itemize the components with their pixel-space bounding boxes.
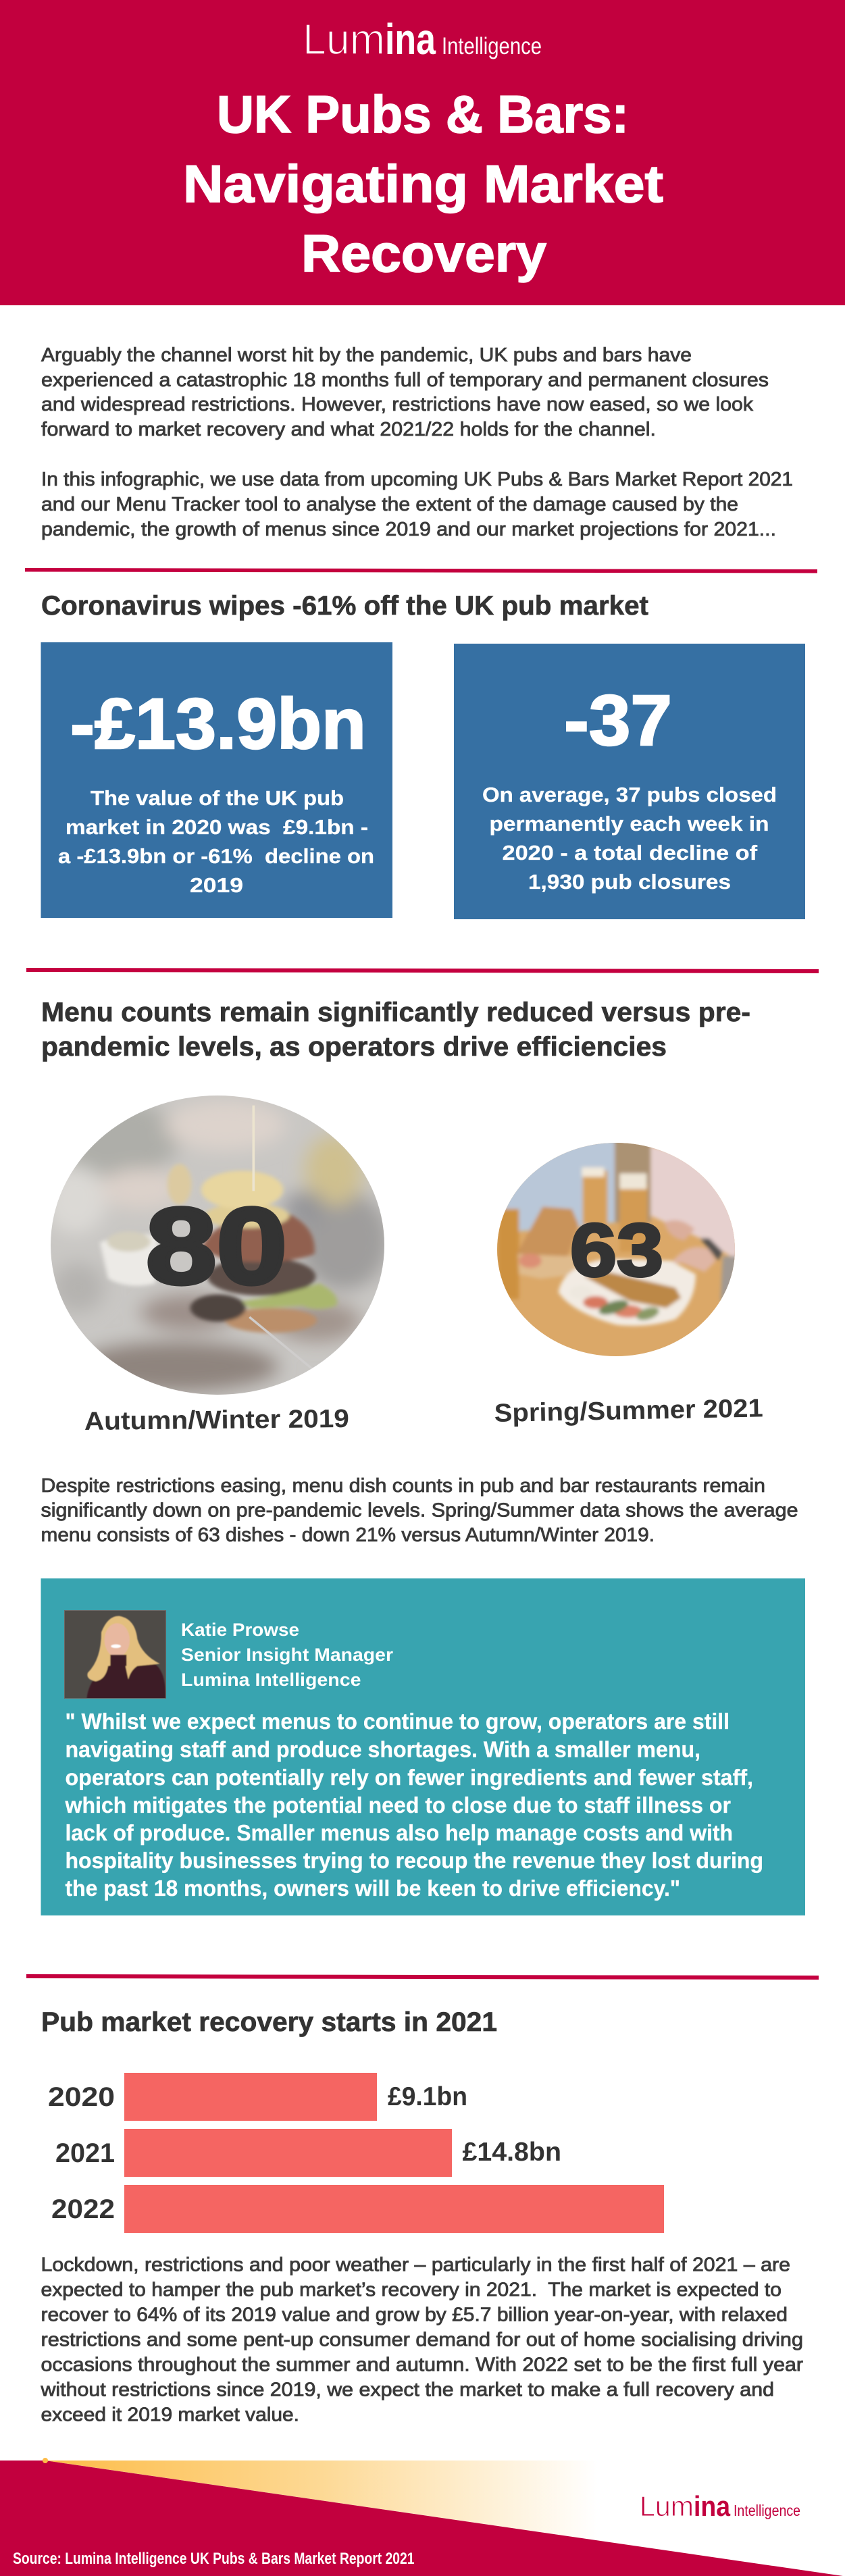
label: Autumn/Winter 2019: Autumn/Winter 2019 xyxy=(84,1405,349,1436)
market value description: The value of the UK pub xyxy=(91,786,344,810)
panel: pub closures xyxy=(454,644,805,919)
stat: -£13.9bn: -£13.9bn xyxy=(70,684,366,764)
menu text block: Despite restrictions easing, menu dish counts in pub and bar restaurants remain xyxy=(41,1475,765,1497)
footer logo: Lum xyxy=(640,2490,694,2522)
intro text: Arguably the channel worst hit by the pandemic, UK pubs and bars have xyxy=(41,344,692,366)
market value description: 2019 xyxy=(190,873,243,897)
quote text: the past 18 months, owners will be keen to drive efficiency." xyxy=(65,1876,680,1901)
footer logo: Intelligence xyxy=(734,2502,800,2519)
recovery text block: Lockdown, restrictions and poor weather – particularly in the first half of 2021 – are xyxy=(41,2255,790,2276)
logo: Lumina Intelligence xyxy=(303,15,542,63)
quote text: lack of produce. Smaller menus also help manage costs and with xyxy=(65,1820,733,1845)
quote text xyxy=(65,1709,763,1901)
intro text: In this infographic, we use data from upcoming UK Pubs & Bars Market Report 2021 xyxy=(41,469,793,490)
footer logo xyxy=(640,2490,800,2522)
recovery text block xyxy=(40,2255,803,2426)
closures description xyxy=(482,783,777,894)
closures description: 1,930 pub closures xyxy=(528,870,731,894)
recovery text block: without restrictions since 2019, we expect the market to make a full recovery and xyxy=(40,2379,774,2400)
number 63: 63 xyxy=(570,1209,663,1292)
intro text: forward to market recovery and what 2021/22 holds for the channel. xyxy=(41,419,656,440)
portrait photo xyxy=(65,1610,166,1700)
source note: Source: Lumina Intelligence UK Pubs & Bars Market Report 2021 xyxy=(13,2550,415,2568)
logo: Lumina Intelligence: Lum xyxy=(303,15,385,63)
photo circle: burger with 80 dishes xyxy=(45,1091,389,1398)
market value description xyxy=(58,786,374,897)
title: UK Pubs & Bars: xyxy=(217,84,629,144)
quote text: operators can potentially rely on fewer ingredients and fewer staff, xyxy=(65,1765,753,1790)
recovery text block: recover to 64% of its 2019 value and grow by £5.7 billion year-on-year, with relaxed xyxy=(41,2304,788,2326)
section heading: menu counts xyxy=(41,998,750,1062)
intro text xyxy=(41,344,793,540)
speaker name and role: Katie Prowse xyxy=(181,1620,299,1640)
bar 2021 xyxy=(55,2129,561,2177)
bar chart: market value by year xyxy=(48,2073,664,2233)
intro text: and our Menu Tracker tool to analyse the extent of the damage caused by the xyxy=(41,494,738,515)
footer band xyxy=(0,2458,845,2576)
section heading: recovery: Pub market recovery starts in 2021 xyxy=(41,2007,497,2037)
recovery text block: occasions throughout the summer and autumn. With 2022 set to be the first full year xyxy=(41,2354,803,2376)
closures description: On average, 37 pubs closed xyxy=(482,783,777,806)
bar 2020: 2020 xyxy=(48,2082,115,2112)
speaker name and role: Senior Insight Manager xyxy=(181,1645,394,1665)
menu text block: menu consists of 63 dishes - down 21% versus Autumn/Winter 2019. xyxy=(41,1524,655,1546)
logo: Lumina Intelligence: ina xyxy=(385,15,436,63)
section heading: menu counts: Menu counts remain significantly reduced versus pre- xyxy=(41,998,750,1027)
section heading: coronavirus: Coronavirus wipes -61% off the UK pub market xyxy=(41,591,648,621)
title: Recovery xyxy=(301,224,546,283)
bar 2022: 2022 xyxy=(51,2194,115,2224)
bar 2020 xyxy=(48,2073,467,2121)
quote text: " Whilst we expect menus to continue to grow, operators are still xyxy=(65,1709,729,1734)
bar 2020: £9.1bn xyxy=(388,2082,467,2111)
bar 2022 xyxy=(51,2185,664,2233)
menu text block xyxy=(41,1475,798,1546)
bar 2021: £14.8bn xyxy=(462,2138,561,2167)
intro text: experienced a catastrophic 18 months full of temporary and permanent closures xyxy=(41,369,769,391)
recovery text block: expected to hamper the pub market’s recovery in 2021. The market is expected to xyxy=(41,2279,782,2300)
recovery text block: exceed it 2019 market value. xyxy=(41,2404,299,2426)
stat: -37: -37 xyxy=(564,681,672,761)
section heading: menu counts: pandemic levels, as operators drive efficiencies xyxy=(41,1032,667,1062)
logo: Lumina Intelligence: Intelligence xyxy=(442,33,542,59)
menu text block: significantly down on pre-pandemic levels. Spring/Summer data shows the average xyxy=(41,1499,798,1521)
intro text: pandemic, the growth of menus since 2019 and our market projections for 2021... xyxy=(41,519,776,540)
speaker name and role xyxy=(181,1620,394,1690)
market value description: a -£13.9bn or -61% decline on xyxy=(58,844,374,868)
closures description: 2020 - a total decline of xyxy=(503,841,758,865)
quote text: navigating staff and produce shortages. With a smaller menu, xyxy=(65,1737,700,1761)
header banner xyxy=(0,0,845,305)
number 80: 80 xyxy=(146,1185,287,1306)
title xyxy=(183,84,663,283)
title: Navigating Market xyxy=(183,154,663,213)
panel: market value decline xyxy=(41,642,392,918)
closures description: permanently each week in xyxy=(489,812,769,835)
panel: quote xyxy=(41,1578,805,1915)
recovery text block: restrictions and some pent-up consumer demand for out of home socialising driving xyxy=(41,2329,803,2350)
footer logo: ina xyxy=(694,2490,731,2522)
photo circle: pub meal with 63 dishes xyxy=(493,1138,740,1361)
intro text: and widespread restrictions. However, restrictions have now eased, so we look xyxy=(41,394,754,415)
label: Spring/Summer 2021: Spring/Summer 2021 xyxy=(494,1394,763,1428)
bar 2021: 2021 xyxy=(55,2138,115,2168)
quote text: which mitigates the potential need to close due to staff illness or xyxy=(65,1793,731,1818)
speaker name and role: Lumina Intelligence xyxy=(181,1670,361,1690)
market value description: market in 2020 was £9.1bn - xyxy=(66,815,368,839)
quote text: hospitality businesses trying to recoup the revenue they lost during xyxy=(65,1848,763,1873)
